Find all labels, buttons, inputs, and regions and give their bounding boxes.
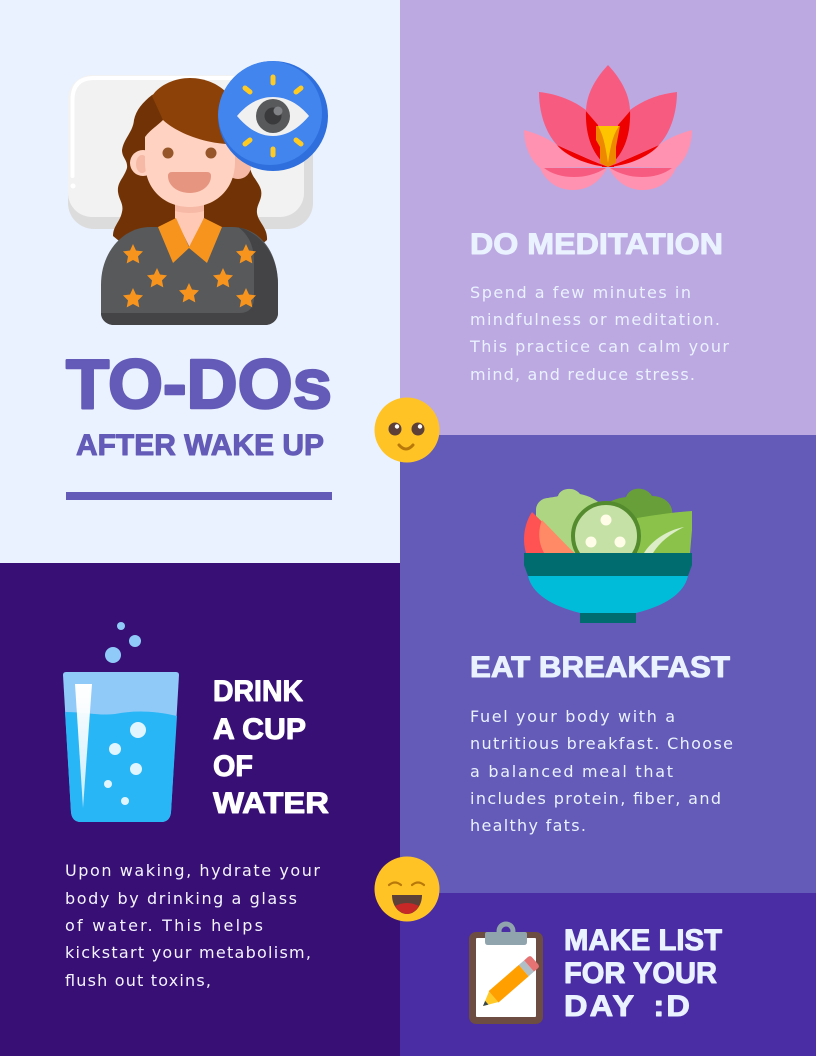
icon: eye badge (218, 61, 328, 171)
shirt (101, 227, 278, 325)
text: breakfast description: a balanced meal that (470, 762, 673, 781)
heading: make list for your day: FOR YOUR (564, 957, 717, 990)
icon: woman waking up (68, 61, 328, 325)
icon: smiling emoji (374, 398, 440, 462)
text: water description: body by drinking a glass (65, 889, 297, 908)
text: water description: of water. This helps (65, 916, 263, 935)
heading: eat breakfast: EAT BREAKFAST (470, 651, 730, 684)
panel: eat breakfast (400, 435, 816, 893)
text: meditation description: mind, and reduce stress. (470, 365, 695, 384)
face (145, 120, 235, 207)
text: water description: flush out toxins, (65, 971, 211, 990)
heading: drink a cup of water: OF (213, 750, 253, 783)
pillow (68, 75, 313, 229)
text: meditation description: Spend a few minutes in (470, 283, 691, 302)
text: breakfast description: Fuel your body with a (470, 707, 675, 726)
neck (175, 200, 204, 248)
icon: laughing emoji (374, 856, 440, 922)
text: breakfast description (470, 707, 733, 835)
heading: make list for your day: MAKE LIST (564, 924, 722, 957)
heading: do meditation: DO MEDITATION (470, 228, 723, 261)
text: water description (65, 861, 320, 990)
heading: drink a cup of water (213, 675, 329, 820)
icon: glass of water (63, 622, 179, 822)
text: meditation description: This practice can calm your (469, 337, 729, 356)
heading: after wake up: AFTER WAKE UP (76, 429, 324, 462)
title underline (66, 492, 332, 500)
heading: drink a cup of water: DRINK (213, 675, 303, 708)
stars (123, 244, 256, 307)
text: water description: kickstart your metabolism, (65, 943, 311, 962)
text: meditation description: mindfulness or meditation. (470, 310, 720, 329)
text: water description: Upon waking, hydrate your (65, 861, 320, 880)
heading: TO-DOs: TO-DOs (66, 345, 332, 423)
heading: make list for your day: DAY :D (564, 990, 692, 1023)
text: meditation description (469, 283, 729, 384)
heading: make list for your day (564, 924, 722, 1023)
text: breakfast description: nutritious breakfast. Choose (470, 734, 733, 753)
heading: drink a cup of water: A CUP (213, 713, 306, 746)
icon: lotus (524, 65, 692, 190)
text: breakfast description: includes protein, fiber, and (470, 789, 721, 808)
hair (113, 78, 267, 250)
panel: drink water (0, 563, 400, 1056)
panel: title (66, 61, 332, 500)
collar (158, 218, 222, 263)
panel: do meditation (400, 0, 816, 435)
panel: make list (400, 893, 816, 1056)
icon: salad bowl (524, 489, 692, 623)
icon: clipboard and pencil (469, 922, 543, 1024)
text: breakfast description: healthy fats. (470, 816, 586, 835)
heading: drink a cup of water: WATER (213, 787, 329, 820)
ears (130, 150, 251, 179)
